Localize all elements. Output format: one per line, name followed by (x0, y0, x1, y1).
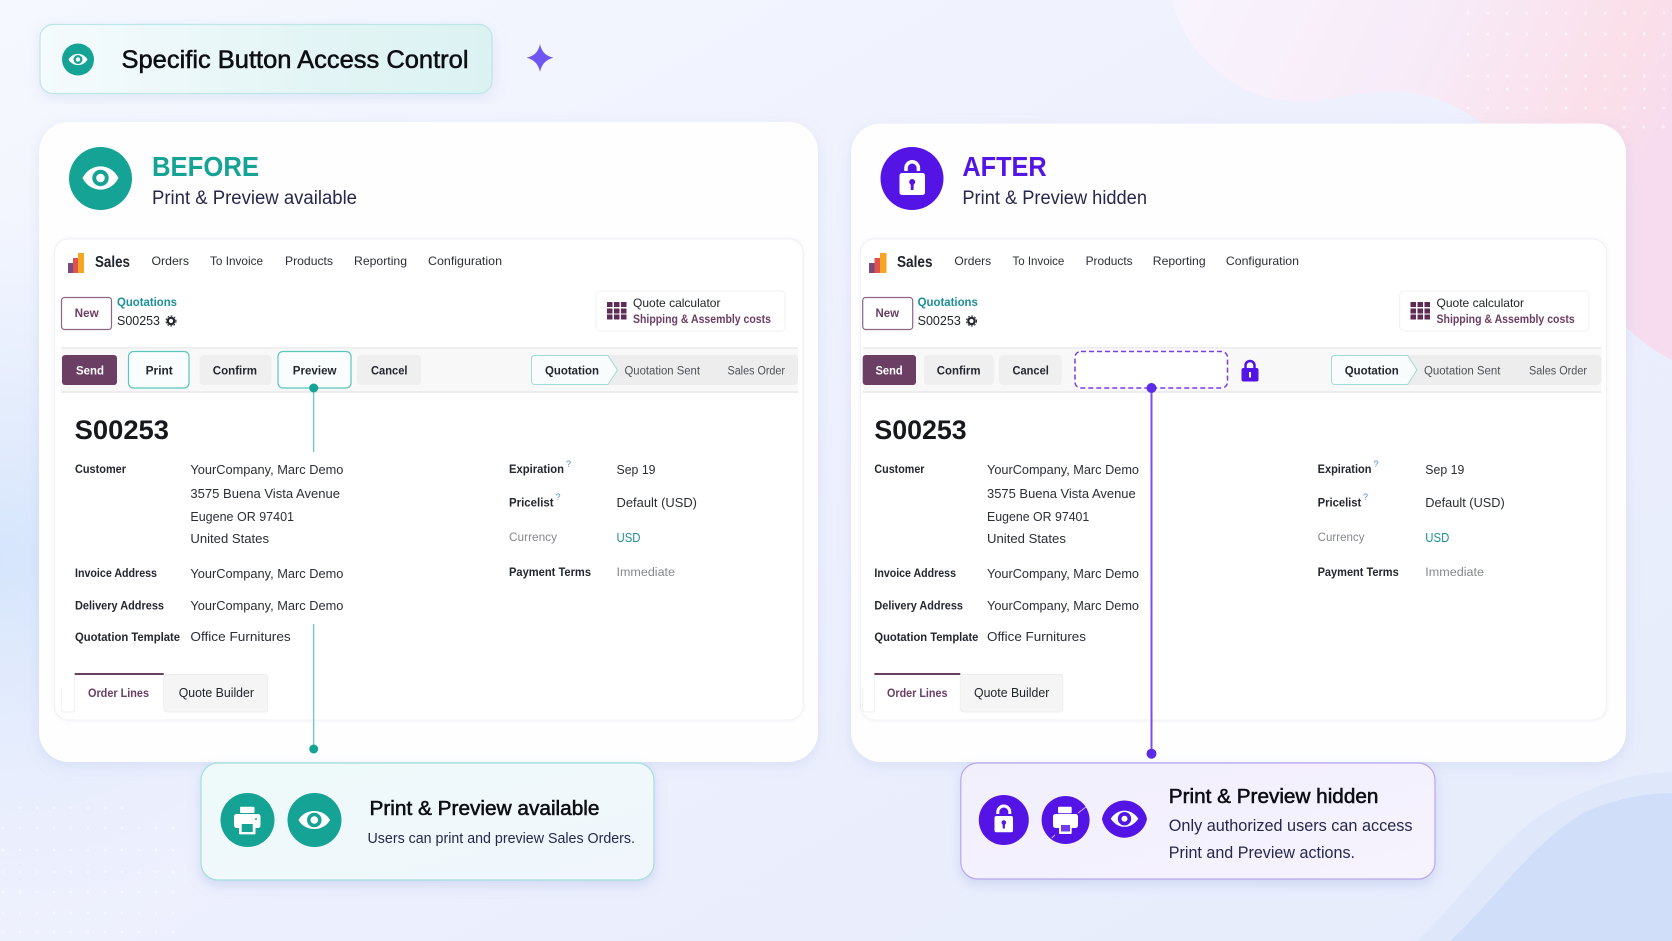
status bar: Quotation Sent (1424, 366, 1501, 378)
callout text: Only authorized users can access (1169, 817, 1412, 835)
record title: S00253 (874, 415, 967, 445)
quote calculator: Shipping & Assembly costs (633, 312, 771, 326)
icon: small lock (1242, 361, 1258, 382)
callout text: Print and Preview actions. (1169, 844, 1355, 862)
record header: New (876, 308, 899, 320)
status bar (1331, 355, 1601, 385)
order fields: Expiration (509, 464, 564, 476)
order fields: Immediate (1425, 567, 1484, 579)
panel: before (39, 122, 818, 762)
nav bar: To Invoice (210, 254, 263, 268)
nav bar: Reporting (354, 254, 407, 268)
tabs: Order Lines (88, 686, 149, 700)
action toolbar: Confirm (937, 364, 980, 378)
customer fields: YourCompany, Marc Demo (190, 462, 343, 477)
nav bar: To Invoice (1012, 254, 1065, 268)
record header (863, 295, 978, 330)
customer fields: Invoice Address (75, 568, 157, 580)
callout: hidden (961, 763, 1435, 879)
customer fields: Customer (874, 464, 925, 476)
status bar: Quotation (1345, 364, 1399, 378)
nav bar: Products (285, 254, 333, 268)
print button (128, 352, 189, 388)
customer fields: Quotation Template (874, 632, 978, 644)
quote calculator (1400, 291, 1589, 331)
customer fields (75, 462, 343, 644)
icon: grid (1410, 302, 1430, 320)
sales window (860, 239, 1606, 720)
customer fields: YourCompany, Marc Demo (190, 566, 343, 581)
icon: lock (880, 147, 944, 210)
before header (69, 147, 357, 210)
preview button (278, 352, 351, 388)
title: Specific Button Access Control (122, 46, 468, 74)
order fields: Pricelist (509, 498, 554, 510)
order fields (1318, 459, 1505, 579)
order fields: Default (USD) (616, 495, 697, 510)
customer fields: YourCompany, Marc Demo (987, 598, 1139, 613)
action toolbar (61, 347, 798, 393)
customer fields: Office Furnitures (190, 629, 291, 644)
nav bar: Sales (95, 254, 130, 271)
print button: Print (146, 364, 173, 378)
order fields: Payment Terms (1318, 567, 1399, 579)
order fields: Sep 19 (1425, 462, 1464, 477)
callout title: Print & Preview available (370, 798, 600, 820)
customer fields: 3575 Buena Vista Avenue (190, 486, 340, 501)
icon: gear (966, 316, 976, 326)
icon: eye (288, 793, 342, 847)
order fields: Currency (1318, 532, 1365, 544)
heading: after: AFTER (962, 151, 1047, 182)
order fields: Sep 19 (616, 462, 656, 477)
status bar: Sales Order (728, 366, 785, 378)
heading: before: BEFORE (152, 151, 259, 182)
customer fields: United States (987, 531, 1066, 546)
icon: printer (1042, 796, 1090, 844)
tabs (62, 673, 268, 712)
icon: sales logo (869, 253, 886, 273)
customer fields: Delivery Address (874, 600, 963, 612)
customer fields: Office Furnitures (987, 629, 1087, 644)
connector: placeholder to callout (1146, 383, 1156, 759)
status bar: Quotation Sent (624, 366, 701, 378)
order fields: ? (1363, 492, 1368, 502)
action toolbar: Cancel (371, 364, 408, 378)
title badge (40, 24, 492, 94)
action toolbar: Cancel (1012, 364, 1049, 378)
record header: Quotations (117, 295, 177, 309)
action toolbar (863, 347, 1601, 393)
quote calculator (596, 291, 785, 331)
order fields: Currency (509, 532, 557, 544)
icon: eye (62, 44, 94, 76)
order fields: Payment Terms (509, 567, 591, 579)
status bar: Quotation (545, 364, 599, 378)
order fields: Immediate (616, 567, 675, 579)
tabs: Quote Builder (179, 686, 254, 700)
nav bar: Configuration (1226, 254, 1299, 268)
tabs (863, 673, 1063, 712)
icon: grid (607, 302, 626, 320)
icon: sales logo (68, 253, 84, 273)
nav bar: Orders (954, 254, 991, 268)
subheading: Print & Preview hidden (962, 188, 1147, 209)
nav bar: Reporting (1153, 254, 1206, 268)
customer fields: Customer (75, 464, 126, 476)
nav bar (869, 253, 1299, 273)
customer fields: Delivery Address (75, 600, 164, 612)
subheading: Print & Preview available (152, 188, 357, 209)
after header (880, 147, 1147, 210)
order fields: Pricelist (1318, 498, 1361, 510)
customer fields: 3575 Buena Vista Avenue (987, 486, 1136, 501)
callout title: Print & Preview hidden (1169, 786, 1378, 808)
nav bar: Products (1086, 254, 1133, 268)
tabs: Quote Builder (974, 686, 1049, 700)
customer fields: Quotation Template (75, 632, 180, 644)
hidden buttons placeholder (1075, 352, 1228, 388)
order fields: Default (USD) (1425, 495, 1505, 510)
action toolbar: Send (876, 364, 903, 378)
nav bar: Configuration (428, 254, 502, 268)
record header: S00253 (918, 313, 961, 328)
customer fields: YourCompany, Marc Demo (190, 598, 343, 613)
nav bar (68, 253, 502, 273)
quote calculator: Quote calculator (633, 296, 720, 310)
customer fields: Eugene OR 97401 (987, 509, 1089, 524)
action toolbar: Confirm (213, 364, 257, 378)
nav bar: Sales (897, 254, 932, 271)
callout text: Users can print and preview Sales Orders. (368, 830, 635, 847)
customer fields: YourCompany, Marc Demo (987, 462, 1139, 477)
customer fields: YourCompany, Marc Demo (987, 566, 1139, 581)
quote calculator: Quote calculator (1436, 296, 1524, 310)
action toolbar: Send (76, 364, 104, 378)
order fields: ? (566, 459, 571, 469)
connector: preview to callout (309, 384, 318, 754)
customer fields (874, 462, 1139, 644)
customer fields: Eugene OR 97401 (190, 509, 294, 524)
icon: gear (166, 316, 176, 326)
order fields (509, 459, 697, 579)
tabs: Order Lines (887, 686, 948, 700)
icon: eye (69, 147, 132, 210)
sales window (54, 239, 803, 720)
preview button: Preview (293, 364, 337, 378)
callout text (1169, 817, 1412, 862)
record header: Quotations (918, 295, 978, 309)
customer fields: Invoice Address (874, 568, 956, 580)
order fields: ? (1374, 459, 1379, 469)
nav bar: Orders (152, 254, 189, 268)
callout: available (201, 763, 654, 880)
status bar (531, 355, 798, 385)
icon: eye (1102, 800, 1147, 838)
record header: S00253 (117, 313, 160, 328)
panel: after (851, 124, 1626, 762)
order fields: USD (616, 530, 640, 545)
order fields: USD (1425, 530, 1449, 545)
quote calculator: Shipping & Assembly costs (1436, 312, 1575, 326)
icon: sparkle (526, 44, 554, 72)
record header (62, 295, 177, 330)
record header: New (75, 308, 99, 320)
order fields: ? (556, 492, 561, 502)
icon: printer (220, 793, 274, 847)
status bar: Sales Order (1529, 366, 1587, 378)
customer fields: United States (190, 531, 270, 546)
record title: S00253 (75, 415, 169, 445)
icon: lock (979, 795, 1029, 845)
order fields: Expiration (1318, 464, 1372, 476)
